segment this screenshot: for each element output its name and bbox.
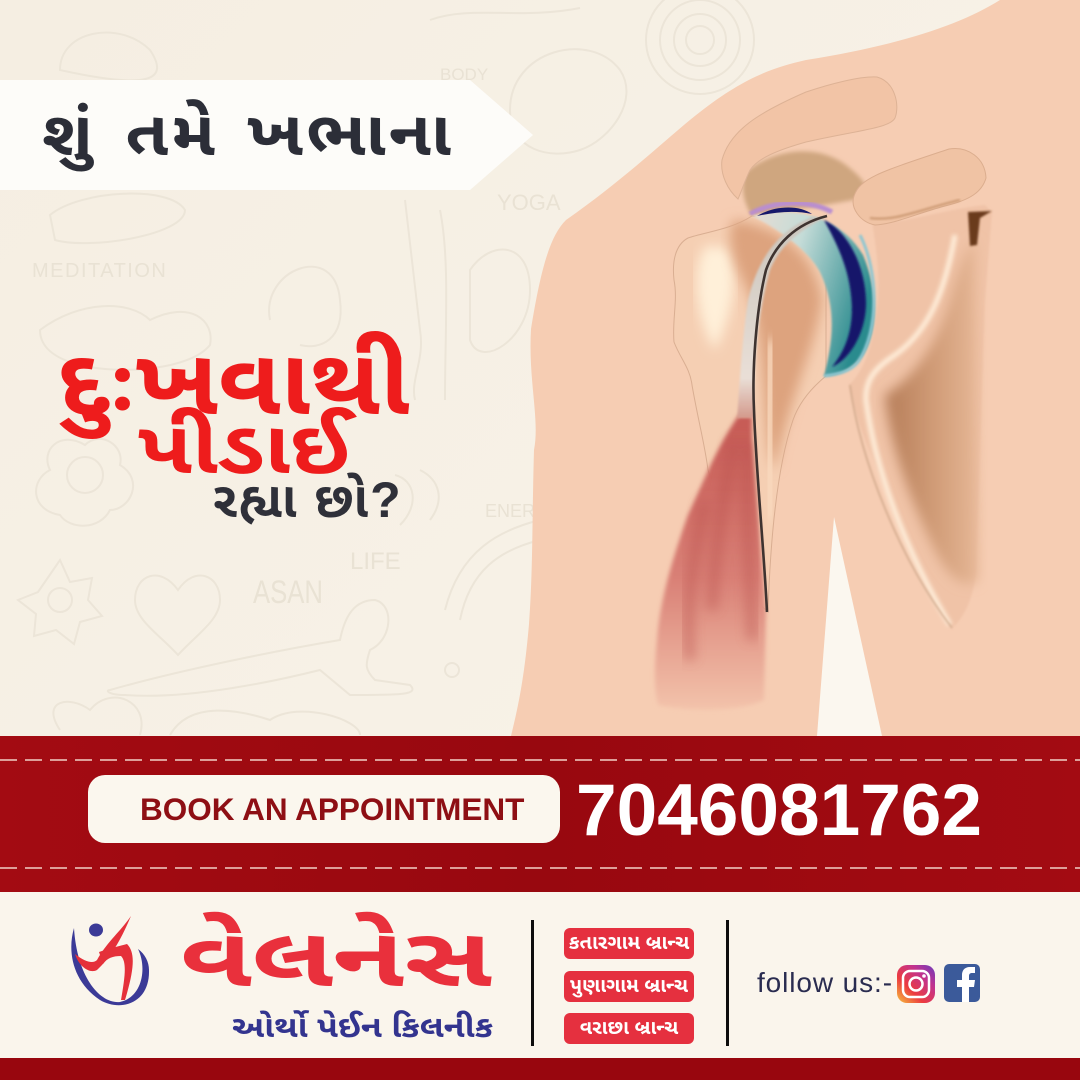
appointment label: BOOK AN APPOINTMENT	[140, 791, 524, 827]
appointment pill	[88, 775, 560, 843]
red line one: દુઃખવાથી	[58, 330, 409, 434]
icon: instagram	[897, 965, 935, 1003]
background: faint words	[32, 65, 561, 610]
clinic name: વેલનેસ	[180, 911, 492, 1004]
branch: Punagam: પુણાગામ બ્રાન્ચ	[570, 975, 688, 997]
background: faint words: LIFE	[350, 548, 401, 575]
dashed stitch line top	[0, 759, 1080, 761]
humerus bone	[673, 216, 826, 612]
branch: Punagam	[564, 971, 694, 1002]
tan saddle under acromion	[743, 151, 867, 216]
icon: facebook	[944, 964, 980, 1002]
cyan articular cartilage	[752, 212, 874, 376]
acromion bone	[722, 77, 897, 199]
armpit gap	[817, 517, 882, 736]
follow us label: follow us:-	[757, 967, 893, 998]
divider	[726, 920, 729, 1046]
dashed stitch line bottom	[0, 867, 1080, 869]
background: faint yoga line art	[18, 0, 754, 735]
clinic logo icon	[71, 916, 149, 1006]
background: faint words: ENERGY	[485, 501, 561, 521]
branch: Katargam: કતારગામ બ્રાન્ચ	[569, 932, 689, 954]
heading text: શું તમે ખભાના	[42, 100, 454, 169]
background: faint words: ASAN	[253, 574, 323, 610]
coracoid bone	[853, 149, 986, 225]
branch: Varachha: વરાછા બ્રાન્ચ	[580, 1017, 678, 1039]
muscle	[655, 416, 766, 710]
branch: Varachha	[564, 1013, 694, 1044]
tendon	[737, 217, 825, 418]
purple cartilage arc	[750, 203, 832, 214]
divider	[531, 920, 534, 1046]
illustration: arm and shoulder silhouette	[511, 0, 1080, 736]
navy crescents	[824, 220, 866, 367]
background: faint words: YOGA	[497, 190, 561, 215]
branch: Katargam	[564, 928, 694, 959]
heading arrow banner	[0, 80, 533, 190]
scapula blade	[849, 205, 992, 628]
background: faint words: BODY	[440, 65, 488, 84]
dark line three: રહ્યા છો?	[213, 472, 403, 528]
arrow shape	[0, 80, 533, 190]
phone number: 7046081762	[576, 770, 982, 851]
red line two: પીડાઈ	[138, 406, 350, 489]
appointment banner	[0, 736, 1080, 892]
branch badges	[564, 928, 694, 1044]
clinic subtitle: ઓર્થો પેઈન કિલનીક	[232, 1011, 493, 1044]
bottom red strip	[0, 1058, 1080, 1080]
dark notch	[968, 211, 992, 246]
footer panel	[0, 892, 1080, 1058]
background: faint words: MEDITATION	[32, 260, 167, 282]
main red question text	[58, 330, 410, 528]
